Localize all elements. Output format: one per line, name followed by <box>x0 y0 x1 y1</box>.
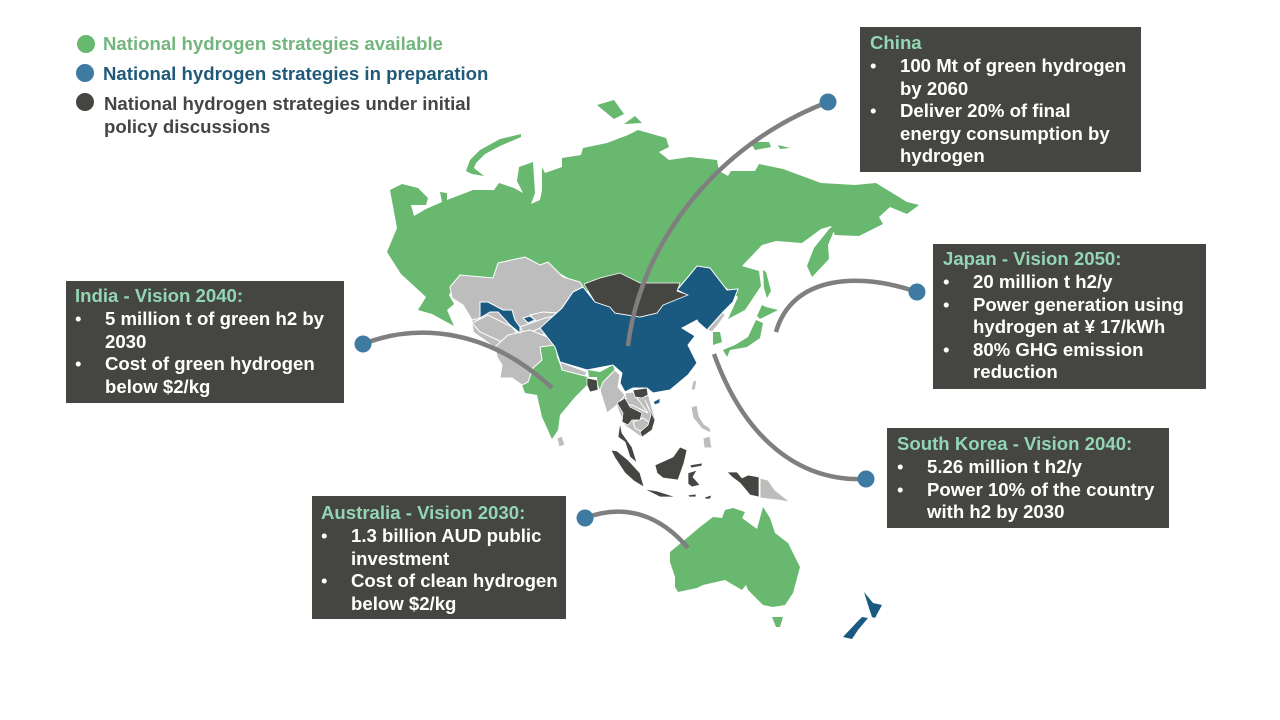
panel: South Korea: 5.26 million t h2/y <box>927 456 1082 477</box>
panel: China: energy consumption by <box>900 123 1110 144</box>
line: Japan <box>776 281 917 332</box>
panel: South Korea <box>887 428 1169 528</box>
line: South Korea <box>714 354 866 479</box>
map: countries in preparation (blue) <box>480 266 882 639</box>
panel: China: Deliver 20% of final <box>900 100 1071 121</box>
panel: Australia <box>312 496 566 619</box>
panel: China <box>860 27 1141 172</box>
panel: Japan: 20 million t h2/y <box>973 271 1112 292</box>
legend <box>76 33 488 137</box>
map: countries under initial discussion (dark) <box>584 273 759 499</box>
panel: Japan: reduction <box>973 361 1058 382</box>
legend marker: in preparation <box>76 64 94 82</box>
panel: China: by 2060 <box>900 78 968 99</box>
legend text: initial discussions: policy discussions <box>104 116 270 137</box>
panel: Australia: investment <box>351 548 449 569</box>
panel: China: 100 Mt of green hydrogen <box>900 55 1126 76</box>
legend text: available: National hydrogen strategies available <box>103 33 443 54</box>
panel: India: India - Vision 2040: <box>75 285 243 306</box>
map: countries with no data (grey) <box>450 257 790 502</box>
legend text: initial discussions <box>104 93 471 137</box>
legend marker: initial discussions <box>76 93 94 111</box>
panel: Australia: 1.3 billion AUD public <box>351 525 541 546</box>
line: China <box>628 102 828 346</box>
panel: South Korea: Power 10% of the country <box>927 479 1154 500</box>
panel: Australia: Cost of clean hydrogen <box>351 570 558 591</box>
legend marker: available <box>77 35 95 53</box>
panel: Japan: Japan - Vision 2050: <box>943 248 1121 269</box>
connector end dots <box>354 94 926 526</box>
panel: Australia: below $2/kg <box>351 593 456 614</box>
map: countries with strategies available (green) <box>387 100 919 627</box>
panel: Japan: Power generation using <box>973 294 1184 315</box>
panel: Australia: Australia - Vision 2030: <box>321 502 525 523</box>
panel: India: 2030 <box>105 331 146 352</box>
legend text: in preparation: National hydrogen strategies in preparation <box>103 63 488 84</box>
panel: China: hydrogen <box>900 145 985 166</box>
panel: Japan: 80% GHG emission <box>973 339 1144 360</box>
legend text: initial discussions: National hydrogen strategies under initial <box>104 93 471 114</box>
panel: Japan: hydrogen at ¥ 17/kWh <box>973 316 1165 337</box>
line: India <box>363 333 552 388</box>
panel: Japan <box>933 244 1206 389</box>
panel: India <box>66 281 344 403</box>
panel: India: below $2/kg <box>105 376 210 397</box>
panel: India: 5 million t of green h2 by <box>105 308 324 329</box>
panel: South Korea: South Korea - Vision 2040: <box>897 433 1132 454</box>
panel: India: Cost of green hydrogen <box>105 353 315 374</box>
line: Australia <box>585 512 688 548</box>
panel: China: China <box>870 32 922 53</box>
connector lines <box>363 102 917 548</box>
panel: South Korea: with h2 by 2030 <box>927 501 1064 522</box>
